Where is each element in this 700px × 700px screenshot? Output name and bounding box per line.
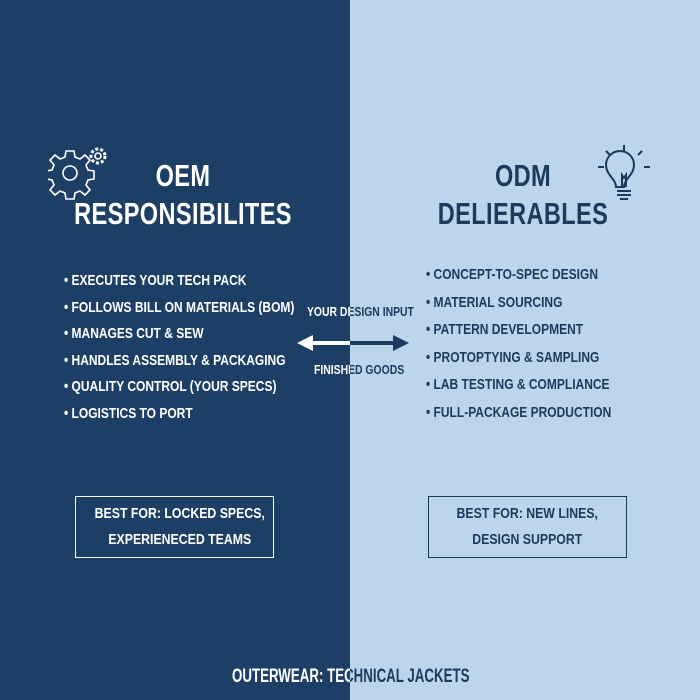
heading: ODM: ODM <box>495 158 551 193</box>
list: OEM responsibilities: • MANAGES CUT & SEW <box>64 325 204 342</box>
heading: ODM <box>438 158 608 231</box>
heading: OEM <box>74 158 292 231</box>
list: OEM responsibilities: • FOLLOWS BILL ON MATERIALS (BOM) <box>64 299 294 316</box>
icon: lightbulb <box>598 145 650 200</box>
callout: best for OEM: EXPERIENECED TEAMS <box>108 531 251 548</box>
list: OEM responsibilities: • LOGISTICS TO PORT <box>64 405 193 422</box>
heading: OEM: OEM <box>156 158 210 193</box>
callout: best for OEM <box>75 496 274 558</box>
list: ODM deliverables: • FULL-PACKAGE PRODUCTION <box>426 404 611 421</box>
list: OEM responsibilities: • EXECUTES YOUR TECH PACK <box>64 272 246 289</box>
list: ODM deliverables: • PROTOPTYING & SAMPLING <box>426 349 599 366</box>
list: OEM responsibilities: • QUALITY CONTROL (YOUR SPECS) <box>64 378 276 395</box>
list: ODM deliverables: • PATTERN DEVELOPMENT <box>426 321 583 338</box>
list: ODM deliverables <box>426 266 611 421</box>
callout: best for OEM: BEST FOR: LOCKED SPECS, <box>95 505 265 522</box>
icon: gears <box>48 148 106 200</box>
panel: OEM <box>0 0 350 700</box>
list: OEM responsibilities: • HANDLES ASSEMBLY & PACKAGING <box>64 352 286 369</box>
heading: OEM: RESPONSIBILITES <box>74 196 292 231</box>
callout: best for ODM: BEST FOR: NEW LINES, <box>457 505 598 522</box>
list: ODM deliverables: • MATERIAL SOURCING <box>426 294 562 311</box>
panel: ODM <box>350 0 700 700</box>
callout: best for ODM <box>428 496 627 558</box>
list: ODM deliverables: • CONCEPT-TO-SPEC DESIGN <box>426 266 598 283</box>
callout: best for ODM: DESIGN SUPPORT <box>472 531 583 548</box>
list: ODM deliverables: • LAB TESTING & COMPLIANCE <box>426 376 610 393</box>
heading: ODM: DELIERABLES <box>438 196 608 231</box>
list: OEM responsibilities <box>64 272 294 422</box>
